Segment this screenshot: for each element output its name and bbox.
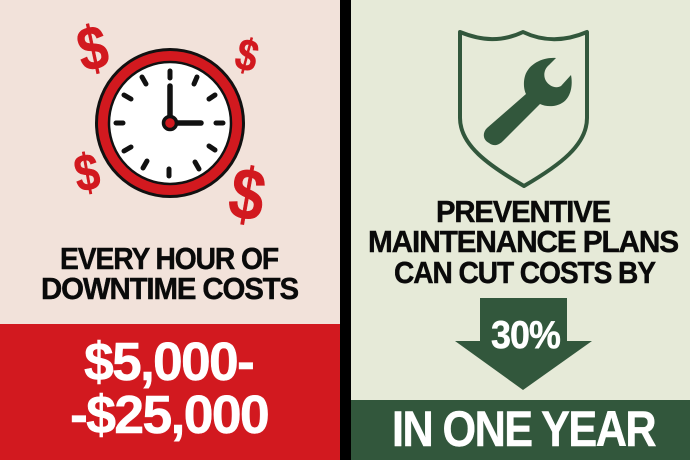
heading: every hour of downtime costs: DOWNTIME COSTS xyxy=(41,271,298,306)
heading: every hour of downtime costs: EVERY HOUR OF xyxy=(60,241,278,276)
icon: wrench xyxy=(484,58,572,145)
heading: every hour of downtime costs xyxy=(41,241,298,306)
heading: preventive maintenance plans: CAN CUT COSTS BY xyxy=(394,255,656,290)
callout: cost range: $5,000- xyxy=(84,332,253,392)
arrow: 30 percent down xyxy=(455,298,592,390)
icon: dollar sign bottom left: $ xyxy=(70,142,104,204)
heading: preventive maintenance plans: MAINTENANCE PLANS xyxy=(368,224,679,259)
icon: clock with dollar signs xyxy=(70,12,271,238)
icon: shield xyxy=(460,32,587,186)
heading: preventive maintenance plans: PREVENTIVE xyxy=(436,194,610,229)
arrow: 30 percent down: 30% xyxy=(491,314,560,357)
panel: downtime costs xyxy=(0,0,340,460)
heading: preventive maintenance plans xyxy=(368,194,679,290)
callout: cost range: -$25,000 xyxy=(70,385,268,445)
panel: preventive maintenance xyxy=(351,0,690,460)
icon: clock xyxy=(96,50,244,196)
divider bar xyxy=(340,0,351,460)
callout: in one year: IN ONE YEAR xyxy=(392,401,656,457)
icon: dollar sign top right: $ xyxy=(230,28,264,82)
icon: shield with wrench xyxy=(460,32,587,186)
icon: dollar sign bottom right: $ xyxy=(223,152,271,238)
callout: cost range xyxy=(0,324,340,460)
icon: dollar sign top left: $ xyxy=(71,12,114,86)
